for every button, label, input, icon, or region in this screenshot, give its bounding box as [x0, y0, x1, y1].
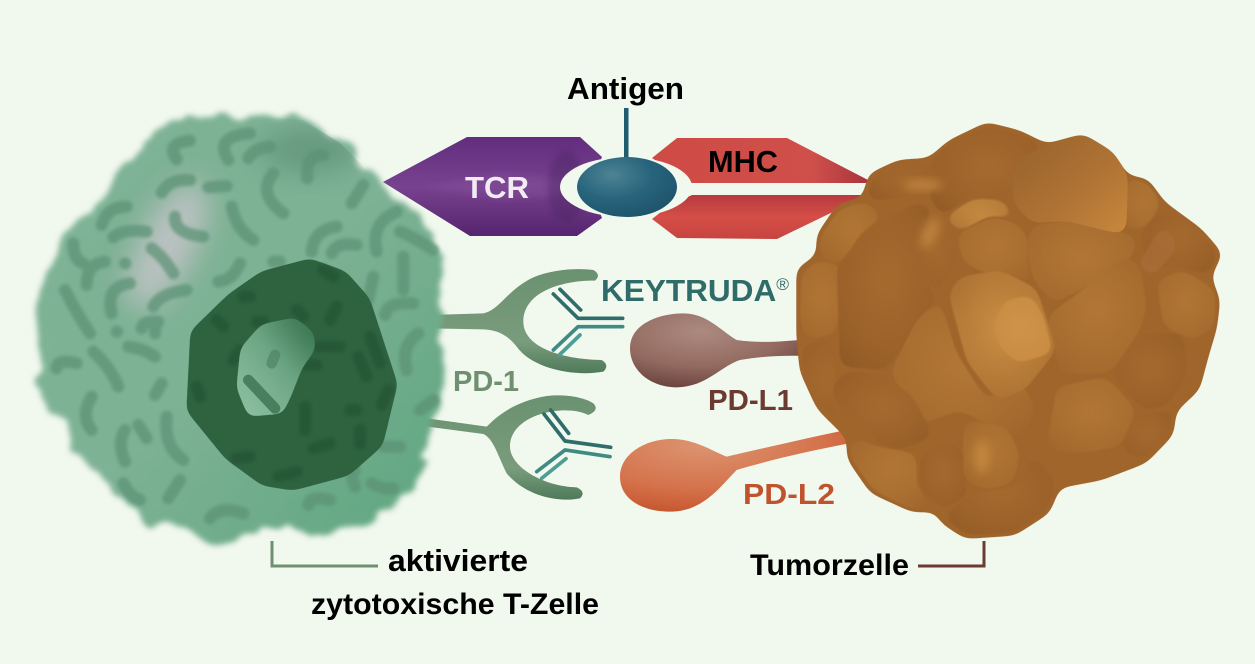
MHC molecule: [652, 138, 868, 239]
nucleolus opening: [236, 317, 316, 417]
bracket: T cell: [272, 541, 378, 566]
PD-1 receptor lower: [420, 395, 596, 500]
label: KEYTRUDA: KEYTRUDA: [601, 273, 773, 308]
infographic: [31, 77, 1220, 620]
cytoplasm shading: [111, 128, 360, 320]
label: TCR: TCR: [465, 170, 529, 205]
label: PD-L2: PD-L2: [743, 479, 835, 511]
antigen stem: [624, 108, 628, 160]
nucleus: [186, 258, 398, 491]
label: Antigen: Antigen: [567, 71, 684, 106]
label: Tumorzelle: Tumorzelle: [750, 549, 909, 582]
KEYTRUDA antibody upper: [553, 289, 623, 355]
organelles: [57, 133, 433, 518]
label: zytotoxische T-Zelle: zytotoxische T-Zelle: [311, 588, 599, 621]
label: PD-L1: PD-L1: [708, 385, 793, 417]
T cell: [36, 113, 442, 547]
PD-1 receptor upper: [430, 269, 606, 373]
label: aktivierte: aktivierte: [388, 543, 528, 578]
T-cell receptor TCR: [383, 137, 602, 236]
binding pocket gap: [560, 157, 692, 217]
antigen: [577, 157, 677, 217]
bracket: tumor cell: [918, 541, 984, 566]
label: KEYTRUDA: ®: [776, 275, 789, 294]
tumor cell: [796, 122, 1223, 539]
label: PD-1: PD-1: [453, 366, 519, 398]
tumor body: [796, 122, 1223, 539]
PD-L1 ligand: [630, 313, 807, 387]
label: MHC: MHC: [708, 144, 778, 179]
PD-L2 ligand: [620, 428, 853, 512]
KEYTRUDA antibody lower: [537, 410, 611, 478]
lobes: [800, 127, 1218, 535]
cell body: [36, 113, 442, 547]
